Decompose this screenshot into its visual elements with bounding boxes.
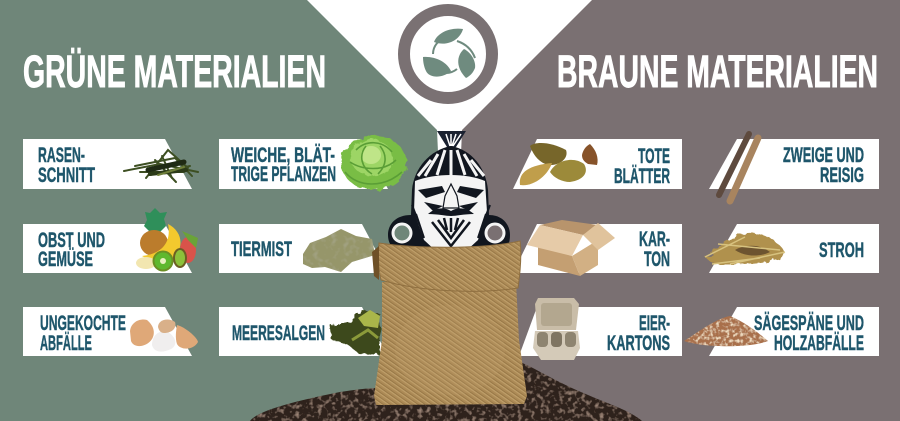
icon: soil mound [250, 362, 642, 421]
panel: Stroh: STROH [819, 239, 864, 262]
icon: wood chips [684, 316, 768, 346]
panel: Stroh [705, 224, 879, 273]
icon: twigs [719, 134, 758, 201]
panel: Obst und Gemüse: GEMÜSE [38, 248, 93, 271]
icon: lettuce [341, 136, 407, 190]
panel: Eierkartons [519, 298, 682, 360]
panel: Tote Blätter: BLÄTTER [614, 165, 670, 188]
panel: Eierkartons: KARTONS [607, 332, 670, 355]
heading: green materials: GRÜNE MATERIALIEN [23, 46, 326, 97]
icon: egg carton [533, 298, 580, 360]
icon: dead leaves [520, 143, 598, 185]
panel: Zweige und Reisig: REISIG [820, 164, 864, 187]
panel: Rasenschnitt: RASEN- [38, 144, 85, 167]
panel: Tiermist [219, 224, 388, 273]
panel: Karton [513, 220, 682, 276]
panel: brown background [450, 0, 900, 421]
icon: fruit [136, 208, 198, 272]
icon: recycling leaves badge [404, 10, 492, 98]
icon: manure [303, 229, 375, 272]
panel: Meeresalgen [219, 307, 388, 356]
panel: Rasenschnitt [23, 139, 198, 189]
panel: Ungekochte Abfälle: UNGEKOCHTE [40, 312, 126, 335]
panel: green background [0, 0, 450, 421]
icon: burlap sack [372, 241, 527, 405]
panel: Karton: KAR- [639, 228, 670, 251]
icon: grass clippings [124, 150, 198, 182]
panel: Weiche, blättrige Pflanzen: WEICHE, BLÄT- [231, 144, 335, 167]
panel: Ungekochte Abfälle: ABFÄLLE [40, 332, 92, 355]
icon: cardboard box [527, 220, 615, 276]
icon: straw [705, 233, 786, 264]
panel: Tote Blätter: TOTE [638, 145, 670, 168]
icon: tribal mask logo [388, 131, 510, 255]
panel: Tiermist: TIERMIST [231, 238, 292, 261]
panel: Obst und Gemüse [23, 208, 198, 273]
icon: seaweed [330, 310, 380, 355]
panel: Eierkartons: EIER- [639, 312, 670, 335]
panel: Rasenschnitt: SCHNITT [38, 164, 95, 187]
panel: Weiche, blättrige Pflanzen: TRIGE PFLANZEN [231, 163, 336, 186]
panel: Karton: TON [644, 248, 670, 271]
panel: Tote Blätter [513, 139, 682, 189]
panel: Weiche, blättrige Pflanzen [219, 136, 407, 190]
panel: Obst und Gemüse: OBST UND [38, 229, 105, 252]
panel: Zweige und Reisig [709, 134, 879, 201]
panel: Ungekochte Abfälle [23, 307, 198, 356]
panel: Meeresalgen: MEERESALGEN [232, 322, 325, 345]
icon: egg shells [130, 319, 198, 352]
panel: Sägespäne und Holzabfälle [684, 307, 879, 356]
